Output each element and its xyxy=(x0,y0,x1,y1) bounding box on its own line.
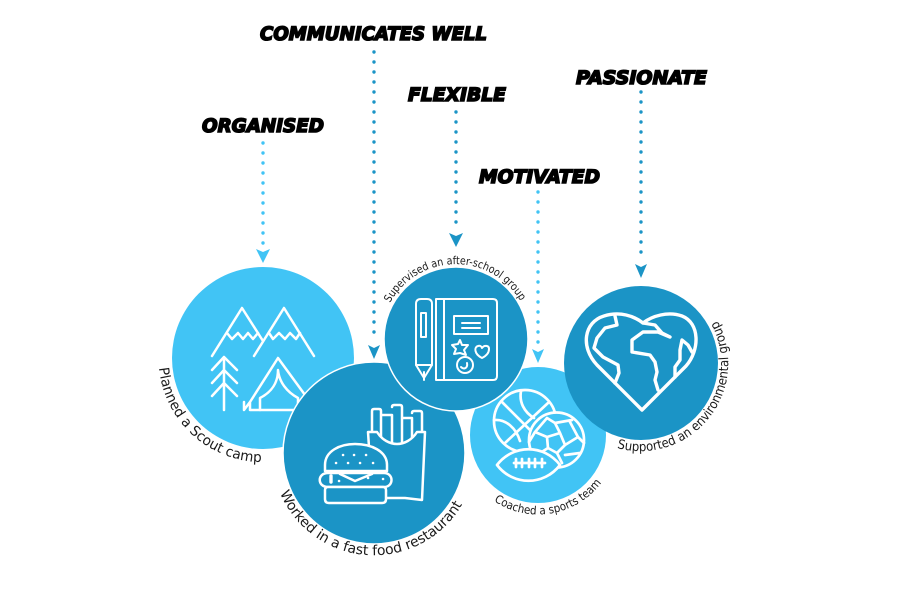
heading: communicates well: COMMUNICATES WELL xyxy=(260,24,487,45)
icon: burger and fries xyxy=(320,405,425,503)
arrow: flexible xyxy=(449,112,463,247)
circle: scout camp xyxy=(172,267,354,449)
panel: scout camp xyxy=(172,267,354,449)
circle: environmental group xyxy=(564,286,718,440)
icon: earth heart xyxy=(586,314,696,410)
caption: after-school group: Supervised an after-school group xyxy=(384,256,524,302)
heading: motivated: MOTIVATED xyxy=(479,167,600,188)
caption: environmental group: Supported an environmental group xyxy=(618,322,730,454)
panel: sports team xyxy=(469,366,607,504)
icon: mountains, tree and tent xyxy=(212,308,316,410)
caption: scout camp: Planned a Scout camp xyxy=(159,368,261,465)
panel: fast food xyxy=(283,362,465,544)
circle: after-school group xyxy=(384,267,528,411)
arrow: motivated xyxy=(532,192,544,363)
circle: fast food xyxy=(283,362,465,544)
circle: sports team xyxy=(469,366,607,504)
caption: sports team: Coached a sports team xyxy=(496,480,601,515)
arrow: organised xyxy=(256,143,270,263)
panel: after-school group xyxy=(384,267,528,411)
heading: passionate: PASSIONATE xyxy=(576,68,707,89)
heading: organised: ORGANISED xyxy=(202,116,324,137)
heading: flexible: FLEXIBLE xyxy=(408,85,506,106)
icon: balls xyxy=(494,390,584,481)
arrow: passionate xyxy=(635,92,647,278)
arrow: communicates well xyxy=(368,52,380,359)
caption: fast food: Worked in a fast food restaurant xyxy=(281,488,462,556)
panel: environmental group xyxy=(564,286,718,440)
icon: notebook and pen xyxy=(416,299,497,380)
